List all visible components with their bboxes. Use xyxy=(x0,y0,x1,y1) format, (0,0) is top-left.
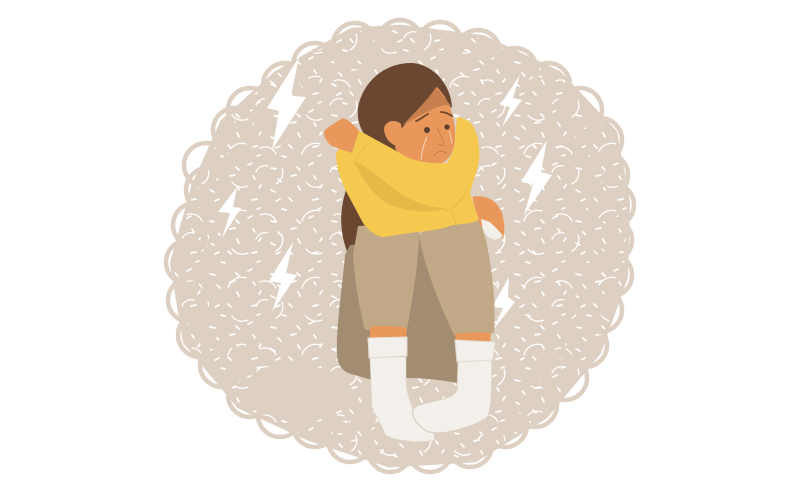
skirt shadow xyxy=(337,240,458,383)
lower hand xyxy=(472,196,504,238)
illustration: anxious girl in a scribble cloud xyxy=(164,18,636,474)
sweater seams xyxy=(355,143,465,225)
trouser crease xyxy=(419,236,420,250)
scribble cloud background xyxy=(160,15,640,475)
left leg xyxy=(353,225,420,330)
sweater shadow fold xyxy=(354,161,446,212)
ankles xyxy=(370,326,407,339)
hair xyxy=(358,63,452,154)
lightning bolts xyxy=(218,57,552,330)
left sock xyxy=(370,357,435,441)
yellow sweater xyxy=(336,117,479,237)
ear xyxy=(384,121,404,147)
solid scribble patch xyxy=(248,366,352,418)
hair falling behind back xyxy=(341,190,370,262)
tissue xyxy=(481,219,503,240)
raised hand xyxy=(324,118,359,153)
right sock xyxy=(413,360,492,433)
right leg xyxy=(419,220,495,335)
hair band shade xyxy=(403,87,452,125)
face xyxy=(395,87,455,165)
girl figure xyxy=(324,63,504,441)
facial features: brows, eyes, nose, mouth, tears xyxy=(416,112,452,160)
